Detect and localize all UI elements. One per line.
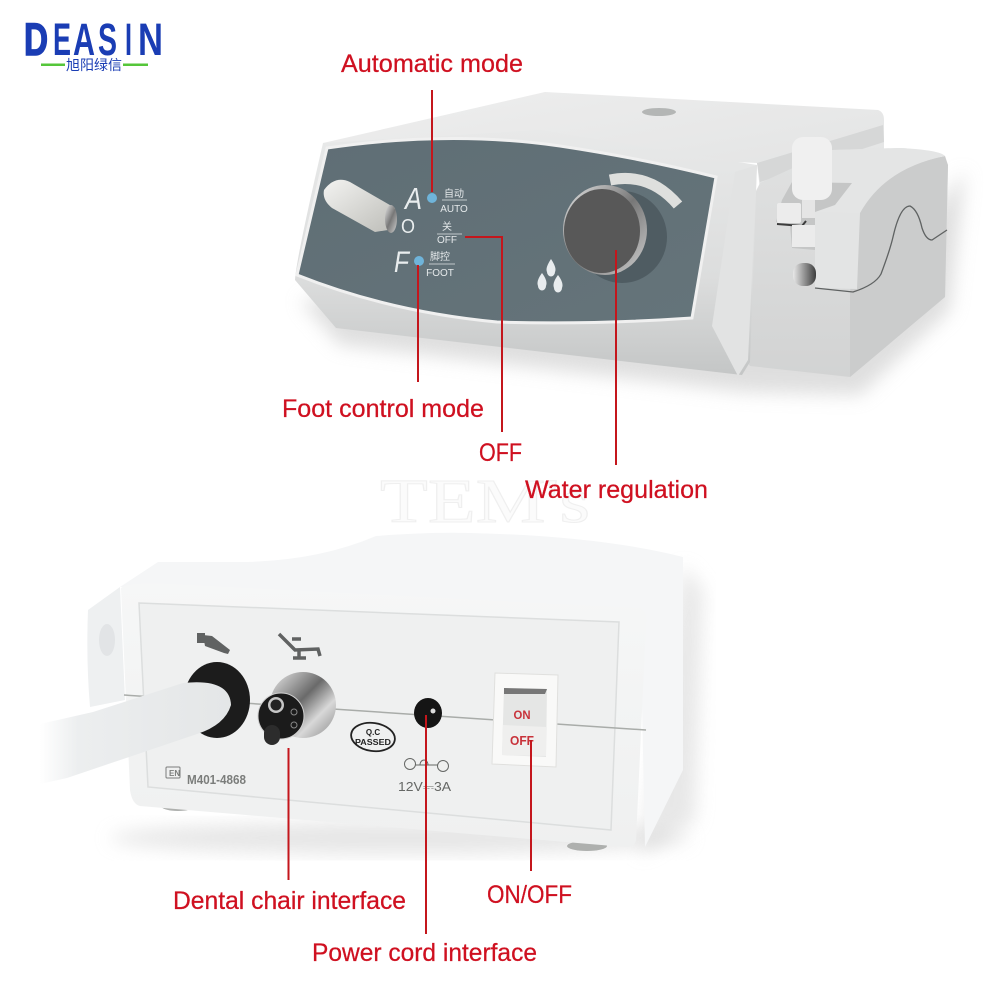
QC badge [349, 720, 397, 754]
peristaltic pump [747, 137, 948, 377]
logo: DEASIN: D [24, 14, 48, 65]
panel labels: FOOT [426, 268, 454, 279]
right side shadow [640, 565, 703, 855]
label: Automatic mode: Automatic mode [341, 50, 523, 78]
panel labels: 自动 [444, 187, 464, 200]
QC badge: PASSED [355, 738, 391, 747]
logo: DEASIN: E [53, 14, 71, 65]
model number [166, 767, 246, 787]
water drops icon [538, 259, 562, 292]
connector [258, 672, 336, 745]
control panel [297, 138, 716, 323]
device: front view [295, 92, 965, 395]
panel labels: F [394, 246, 410, 279]
panel labels: OFF [437, 235, 457, 246]
device: rear view [40, 533, 703, 855]
slot [793, 263, 816, 286]
peg [792, 137, 832, 200]
lobe top [815, 148, 945, 213]
logo: DEASIN: A [73, 14, 95, 65]
logo: DEASIN [24, 14, 163, 73]
ground shadow [110, 822, 690, 854]
panel labels [394, 181, 468, 279]
seam [124, 695, 646, 730]
rocker switch [492, 673, 558, 767]
side face [850, 156, 948, 377]
rear face [121, 584, 646, 847]
hatch [815, 212, 860, 289]
feet [161, 801, 195, 811]
logo: DEASIN: N [138, 14, 163, 65]
leader lines [288, 90, 616, 934]
knob scale arc [610, 178, 678, 205]
panel labels: O [401, 216, 415, 238]
panel labels: 脚控 [430, 250, 450, 263]
logo: DEASIN: 旭阳绿信 [66, 57, 122, 73]
inset panel [139, 603, 619, 830]
rocker switch: OFF [510, 733, 534, 748]
model number: EN [169, 769, 180, 778]
panel labels: A [403, 181, 422, 216]
icon: handpiece [197, 633, 230, 654]
recess [776, 182, 852, 250]
icon: dental chair [279, 634, 320, 658]
front body [295, 130, 757, 375]
top surface [323, 92, 884, 190]
label: Dental chair interface: Dental chair interface [173, 887, 406, 915]
panel labels: AUTO [440, 204, 468, 215]
power spec: 12V⎓3A [398, 779, 451, 794]
label: Foot control mode: Foot control mode [282, 395, 484, 423]
toggle lever [324, 180, 395, 232]
power spec [398, 758, 451, 794]
body top surface [120, 533, 683, 847]
label: Power cord interface: Power cord interface [312, 939, 537, 967]
panel labels: 关 [442, 220, 452, 233]
tab [777, 203, 801, 223]
indicator LEDs [427, 193, 437, 203]
label: OFF: OFF [479, 439, 522, 467]
logo: DEASIN: I [125, 14, 132, 65]
label: Water regulation: Water regulation [525, 476, 708, 504]
knob [577, 191, 667, 283]
rear side piece [87, 587, 125, 707]
cable and grommet [40, 662, 250, 784]
S curve seam [815, 206, 947, 292]
model number: M401-4868 [187, 772, 246, 787]
watermark: TEM's [380, 468, 590, 536]
rocker switch: ON [514, 708, 530, 722]
label: ON/OFF: ON/OFF [487, 881, 572, 909]
DC power jack [414, 698, 442, 728]
shadow [300, 170, 965, 395]
QC badge: Q.C [366, 728, 380, 737]
logo: DEASIN: S [98, 14, 117, 65]
